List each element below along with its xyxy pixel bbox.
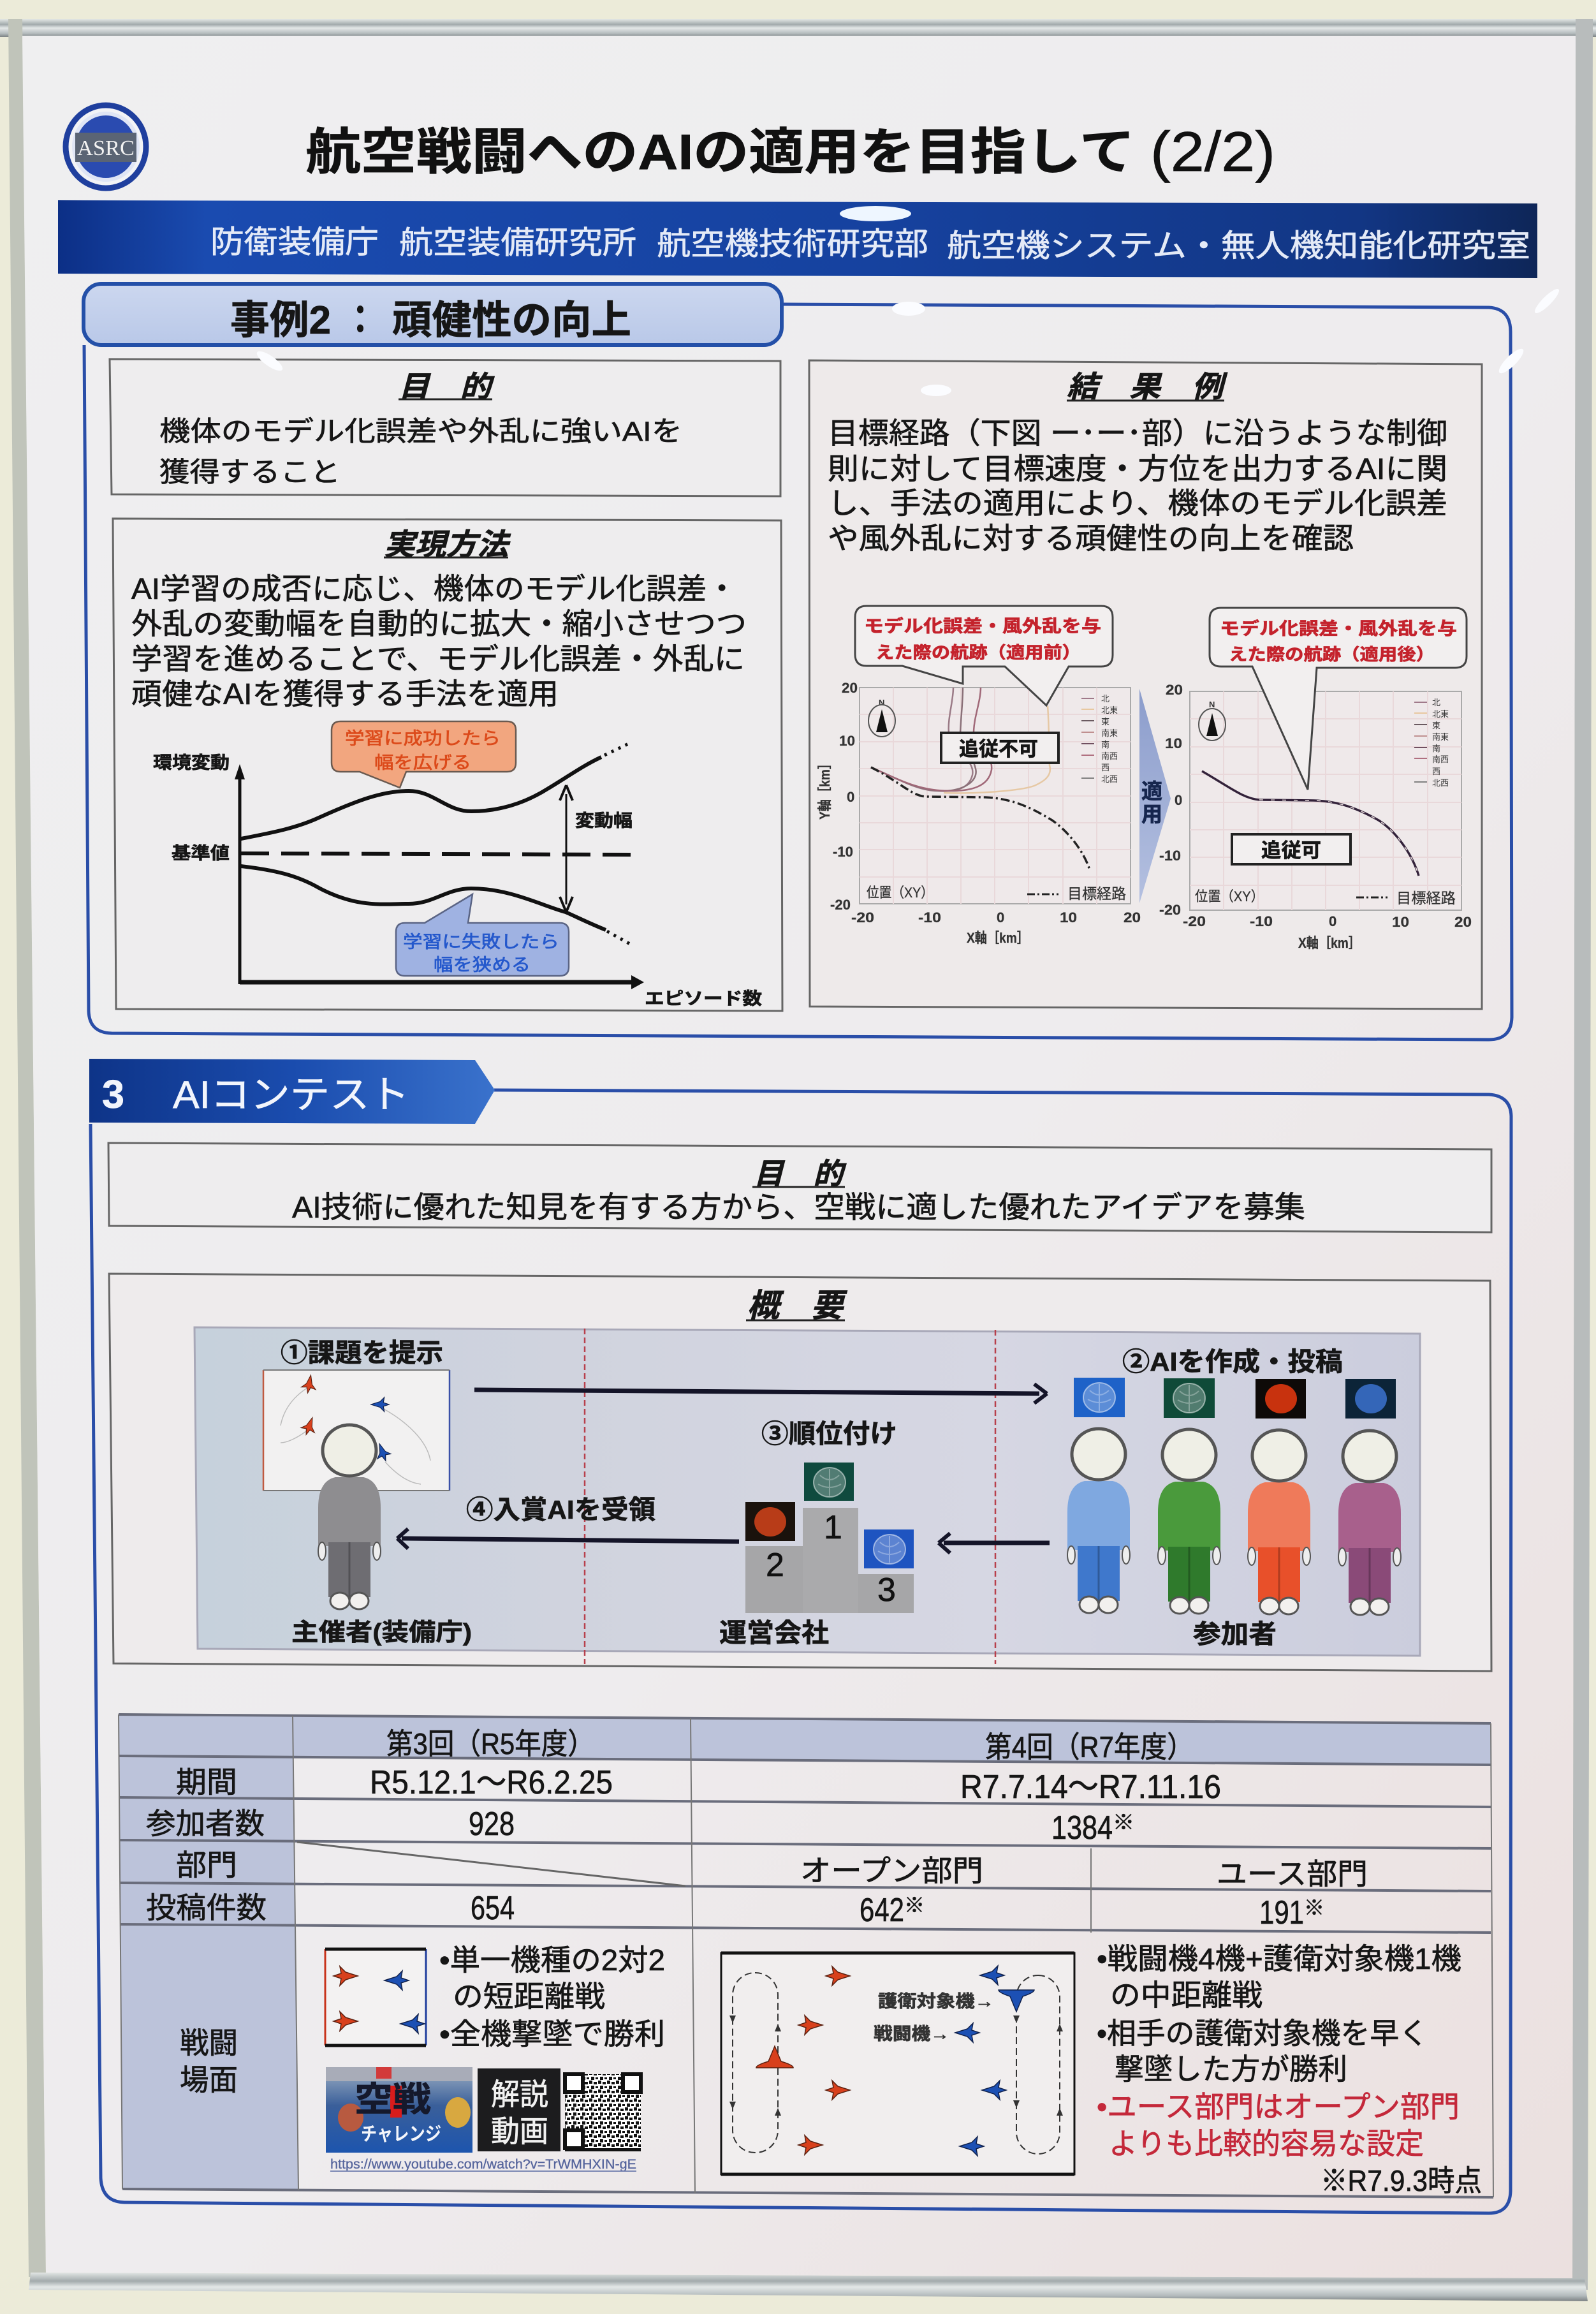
- title: 航空戦闘へのAIの適用を目指して: [305, 124, 1135, 180]
- panel: case 2 robustness: [84, 284, 1512, 1040]
- heading: AI contest: AIコンテスト: [173, 1073, 409, 1116]
- table: contest comparison: 期間: [176, 1765, 237, 1799]
- panel: contest overview: [109, 1274, 1491, 1671]
- text: round 3 description: [439, 1943, 665, 2051]
- chart: trajectory before applying: 南: [1101, 740, 1109, 749]
- callout: narrow on failure: 幅を狭める: [434, 955, 531, 975]
- chart: trajectory before applying: 北西: [1101, 774, 1118, 784]
- panel: method: 学習を進めることで、モデル化誤差・外乱に: [131, 642, 745, 675]
- chart: trajectory after applying: 0: [1175, 792, 1182, 808]
- diagram: contest flow: [194, 1327, 1420, 1664]
- callout: widen on success: 学習に成功したら: [345, 729, 501, 748]
- chart: trajectory before applying: 南東: [1101, 728, 1118, 738]
- AI cards: participants: [1074, 1378, 1396, 1419]
- podium: [745, 1463, 914, 1613]
- table: contest comparison: 654: [471, 1890, 515, 1927]
- podium: 1: [824, 1509, 842, 1546]
- photo glare spots: [254, 286, 1562, 396]
- panel: method: [113, 519, 782, 1011]
- arrow: applying the method: [1139, 689, 1171, 903]
- chart: trajectory after applying: 北: [1432, 698, 1440, 707]
- chart: fluctuation width over episodes: [153, 721, 762, 1008]
- arrow: applying the method: 適: [1141, 779, 1162, 803]
- chart: fluctuation width over episodes: 変動幅: [575, 811, 633, 830]
- chart: trajectory before applying: 10: [1060, 910, 1077, 925]
- chart: trajectory before applying: Y軸［km］: [817, 757, 833, 820]
- chart: trajectory before applying: 追従不可: [959, 738, 1038, 760]
- label: organizer: 主催者(装備庁): [291, 1619, 472, 1646]
- chart: fluctuation width over episodes: エピソード数: [645, 989, 762, 1008]
- header band: 航空機システム・無人機知能化研究室: [947, 229, 1530, 263]
- label: explanation video: 解説: [491, 2077, 548, 2111]
- chart: trajectory before applying: X軸［km］: [967, 930, 1029, 946]
- chart: fluctuation width over episodes: 基準値: [172, 844, 230, 863]
- step 4: receive winning AI: ④入賞AIを受領: [466, 1495, 655, 1524]
- chart: trajectory before applying: 位置（XY）: [867, 885, 933, 901]
- table: contest comparison: 部門: [176, 1848, 237, 1882]
- text: round 3 description: •単一機種の2対2: [439, 1943, 665, 1977]
- label: participants: 参加者: [1193, 1619, 1277, 1649]
- thumbnail: explanation video: [326, 2067, 472, 2153]
- table: contest comparison: 第3回（R5年度）: [386, 1727, 594, 1760]
- chart: trajectory after applying: 位置（XY）: [1195, 888, 1264, 904]
- thumbnail: explanation video: 空戦: [355, 2081, 431, 2119]
- panel: result example: [809, 360, 1482, 1009]
- chart: trajectory after applying: 20: [1454, 914, 1472, 930]
- text: round 4 description: よりも比較的容易な設定: [1109, 2127, 1424, 2160]
- icon: QR code: [565, 2074, 641, 2151]
- callout: trajectory before applying: [855, 606, 1113, 705]
- table: contest comparison: ※: [904, 1894, 925, 1917]
- callout: widen on success: [332, 721, 516, 788]
- callout: narrow on failure: [396, 894, 569, 976]
- chart: trajectory after applying: 10: [1392, 914, 1409, 930]
- callout: trajectory after applying: えた際の航跡（適用後）: [1229, 645, 1435, 664]
- link: video URL: https://www.youtube.com/watch?v=TrWMHXIN-gE: [330, 2157, 636, 2172]
- callout: widen on success: 幅を広げる: [374, 753, 471, 772]
- panel: purpose: 目 的: [399, 370, 495, 403]
- callout: narrow on failure: 学習に失敗したら: [403, 932, 559, 952]
- heading: case 2: ：: [344, 298, 376, 343]
- table: contest comparison: 投稿件数: [146, 1891, 267, 1924]
- label: explanation video: [478, 2068, 560, 2151]
- panel: contest purpose: 目 的: [754, 1157, 847, 1190]
- diagram: round 3 scene: [325, 1949, 426, 2045]
- chart: trajectory after applying: 南東: [1432, 732, 1449, 742]
- panel: method: 外乱の変動幅を自動的に拡大・縮小させつつ: [131, 607, 747, 640]
- text: round 4 description: •相手の護衛対象機を早く: [1097, 2017, 1428, 2050]
- text: round 3 description: の短距離戦: [453, 1980, 605, 2013]
- label: explanation video: 動画: [491, 2114, 548, 2148]
- title: (2/2): [1150, 120, 1275, 183]
- panel: purpose: [110, 359, 780, 496]
- chart: trajectory before applying: 10: [839, 733, 855, 749]
- chart: trajectory after applying: -20: [1159, 902, 1181, 918]
- chart: trajectory before applying: -20: [851, 910, 874, 925]
- panel: purpose: 獲得すること: [159, 457, 340, 488]
- table: contest comparison: ※: [1113, 1811, 1134, 1834]
- panel: result example: 則に対して目標速度・方位を出力するAIに関: [828, 452, 1447, 485]
- heading: case 2: 頑健性の向上: [392, 298, 631, 343]
- diagram: round 4 scene: 戦闘機→: [874, 2024, 949, 2044]
- panel: method: 実現方法: [384, 527, 511, 561]
- chart: trajectory before applying: -10: [833, 844, 853, 860]
- chart: trajectory before applying: 20: [1124, 910, 1141, 925]
- panel: result example: や風外乱に対する頑健性の向上を確認: [828, 522, 1354, 555]
- table: contest comparison: 参加者数: [146, 1807, 265, 1840]
- chart: trajectory before applying: -20: [830, 897, 851, 913]
- chart: trajectory before applying: 0: [997, 910, 1004, 925]
- panel: AI contest: [89, 1059, 1511, 2213]
- panel: contest purpose: AI技術に優れた知見を有する方から、空戦に適した優れたアイデアを募集: [292, 1190, 1305, 1224]
- heading: case 2: 事例2: [230, 298, 331, 343]
- chart: trajectory after applying: 南西: [1432, 755, 1449, 764]
- podium: 3: [877, 1572, 896, 1609]
- diagram: round 4 scene: [721, 1953, 1074, 2174]
- people: participants: [1067, 1429, 1401, 1615]
- table: contest comparison: 戦闘: [180, 2026, 238, 2060]
- chart: trajectory before applying: 北: [1101, 694, 1109, 704]
- chart: trajectory before applying: [817, 680, 1141, 946]
- chart: trajectory after applying: 10: [1165, 735, 1182, 751]
- title: [305, 120, 1275, 183]
- table: contest comparison: R5.12.1～R6.2.25: [370, 1764, 613, 1801]
- callout: trajectory after applying: モデル化誤差・風外乱を与: [1220, 619, 1457, 638]
- header band: 航空機技術研究部: [657, 227, 928, 262]
- table: contest comparison: 642: [860, 1892, 904, 1929]
- chart: trajectory before applying: 北東: [1101, 705, 1118, 715]
- panel: result example: し、手法の適用により、機体のモデル化誤差: [828, 487, 1447, 520]
- chart: trajectory after applying: 目標経路: [1396, 890, 1456, 906]
- chart: trajectory after applying: 北東: [1432, 709, 1449, 719]
- chart: trajectory after applying: 0: [1329, 913, 1336, 929]
- chart: trajectory before applying: 目標経路: [1067, 885, 1126, 902]
- table: contest comparison: 191: [1259, 1894, 1304, 1931]
- text: round 4 description: •ユース部門はオープン部門: [1097, 2090, 1460, 2123]
- arrow: participants to operator: [939, 1533, 1050, 1553]
- chart: trajectory before applying: 20: [842, 680, 858, 696]
- table: contest comparison: 1384: [1051, 1809, 1113, 1846]
- header band: 防衛装備庁: [210, 225, 379, 260]
- chart: trajectory after applying: -10: [1250, 913, 1273, 929]
- callout: trajectory after applying: [1210, 608, 1467, 790]
- podium: 2: [766, 1547, 784, 1584]
- chart: trajectory after applying: 西: [1432, 767, 1440, 776]
- table: contest comparison: R7.7.14～R7.11.16: [960, 1769, 1221, 1806]
- chart: trajectory after applying: -20: [1183, 913, 1206, 929]
- panel: purpose: 機体のモデル化誤差や外乱に強いAIを: [159, 416, 682, 447]
- table: contest comparison: 場面: [180, 2063, 238, 2097]
- table: contest comparison: [119, 1714, 1493, 2197]
- callout: trajectory before applying: モデル化誤差・風外乱を与: [864, 616, 1101, 636]
- chart: trajectory before applying: 東: [1101, 717, 1109, 726]
- chart: fluctuation width over episodes: 環境変動: [153, 753, 230, 772]
- header band: [58, 200, 1537, 278]
- table: contest comparison: 第4回（R7年度）: [985, 1730, 1194, 1764]
- heading: case 2: [84, 284, 782, 345]
- chart: trajectory after applying: -10: [1159, 848, 1181, 864]
- arrow: winners to organizer: [397, 1529, 739, 1549]
- text: round 4 description: •戦闘機4機+護衛対象機1機: [1097, 1942, 1461, 1975]
- chart: trajectory after applying: [1159, 682, 1472, 951]
- table: contest comparison: ※: [1304, 1896, 1324, 1919]
- diagram: round 4 scene: 護衛対象機→: [878, 1992, 994, 2011]
- chart: trajectory after applying: 20: [1166, 682, 1183, 698]
- chart: trajectory before applying: -10: [918, 910, 941, 925]
- step 2: build and submit AI: ②AIを作成・投稿: [1122, 1347, 1343, 1376]
- text: round 4 description: [1097, 1942, 1461, 2160]
- chart: trajectory before applying: 0: [847, 789, 854, 805]
- chart: trajectory after applying: 南: [1432, 744, 1440, 753]
- chart: trajectory after applying: 追従可: [1261, 839, 1321, 862]
- panel: method: AI学習の成否に応じ、機体のモデル化誤差・: [131, 572, 737, 605]
- table: contest comparison: ユース部門: [1217, 1857, 1368, 1890]
- text: round 4 description: の中距離戦: [1110, 1979, 1263, 2012]
- step 1: present the task: ①課題を提示: [281, 1338, 443, 1367]
- heading: AI contest: 3: [102, 1073, 124, 1117]
- chart: trajectory after applying: 東: [1432, 721, 1440, 730]
- table: contest comparison: オープン部門: [800, 1854, 983, 1887]
- panel: method: 頑健なAIを獲得する手法を適用: [131, 677, 559, 711]
- chart: trajectory after applying: N: [1209, 700, 1215, 709]
- arrow: applying the method: 用: [1141, 802, 1162, 826]
- panel: result example: 目標経路（下図 ー･ー･部）に沿うような制御: [828, 416, 1447, 450]
- header band: 航空装備研究所: [399, 226, 636, 260]
- footnote: as of R7.9.3: ※R7.9.3時点: [1321, 2164, 1482, 2197]
- text: round 3 description: •全機撃墜で勝利: [439, 2017, 665, 2051]
- label: operator: 運営会社: [719, 1618, 829, 1647]
- chart: trajectory after applying: X軸［km］: [1298, 935, 1361, 951]
- chart: trajectory after applying: 北西: [1432, 778, 1449, 788]
- thumbnail: explanation video: チャレンジ: [361, 2124, 441, 2145]
- panel: contest purpose: [108, 1143, 1491, 1232]
- heading: AI contest: [89, 1059, 495, 1124]
- person: organizer: [318, 1425, 381, 1609]
- callout: trajectory before applying: えた際の航跡（適用前）: [875, 643, 1081, 662]
- panel: contest overview: 概 要: [747, 1288, 847, 1323]
- arrow: task to participants: [474, 1384, 1047, 1403]
- step 1: present the task: [263, 1338, 450, 1491]
- chart: trajectory before applying: N: [879, 698, 884, 707]
- chart: trajectory before applying: 西: [1101, 763, 1109, 772]
- logo: ASRC: ASRC: [77, 136, 135, 160]
- table: contest comparison: 928: [469, 1806, 515, 1843]
- chart: trajectory before applying: 南西: [1101, 751, 1118, 761]
- step 3: ranking: ③順位付け: [761, 1419, 897, 1448]
- text: round 4 description: 撃墜した方が勝利: [1115, 2052, 1347, 2086]
- panel: result example: 結 果 例: [1067, 370, 1227, 403]
- logo: ASRC: [66, 105, 146, 188]
